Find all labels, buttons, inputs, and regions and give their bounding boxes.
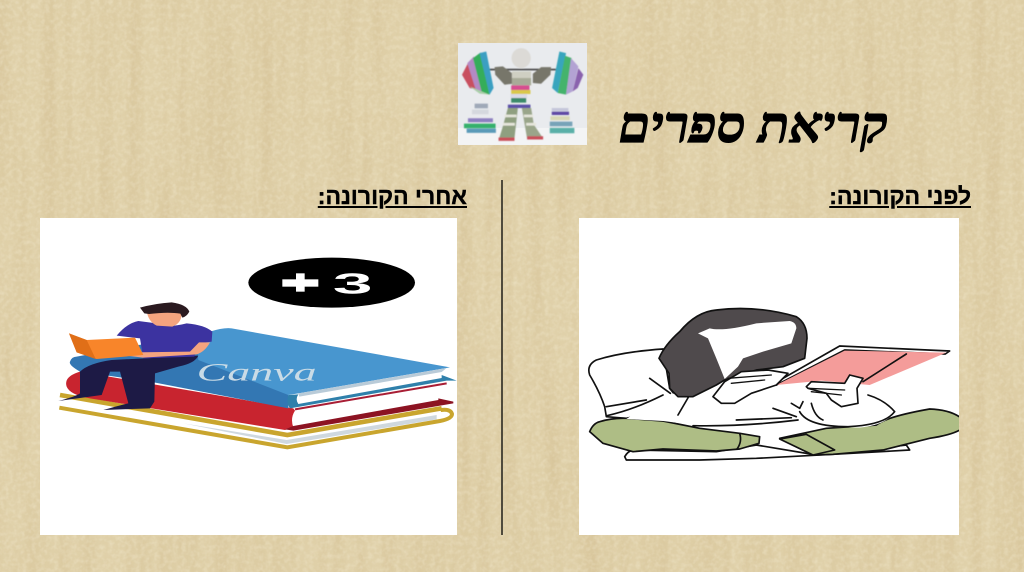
badge: plus three <box>248 258 415 308</box>
illustration: legs <box>590 409 966 460</box>
watermark: Canva <box>197 359 317 387</box>
illustration: stacked books <box>59 328 457 448</box>
illustration: pillow <box>589 349 683 418</box>
heading: after corona: אחרי הקורונה: <box>318 183 467 209</box>
panel: before corona illustration <box>579 218 959 535</box>
blue book <box>70 328 457 408</box>
title: קריאת ספרים <box>619 98 888 154</box>
heading: before corona: לפני הקורונה: <box>829 183 971 209</box>
illustration: hands <box>713 370 788 403</box>
illustration: open book <box>771 346 950 385</box>
divider <box>501 180 503 535</box>
badge: plus three: 3 <box>333 268 373 300</box>
panel: after corona illustration <box>40 218 457 535</box>
yellow book <box>59 395 452 448</box>
illustration: face <box>698 321 796 379</box>
illustration: reading man <box>58 302 212 410</box>
icon: weightlifter made of books <box>458 43 587 145</box>
illustration: hair <box>659 308 807 397</box>
illustration: torso <box>606 355 895 428</box>
red book <box>66 372 453 431</box>
